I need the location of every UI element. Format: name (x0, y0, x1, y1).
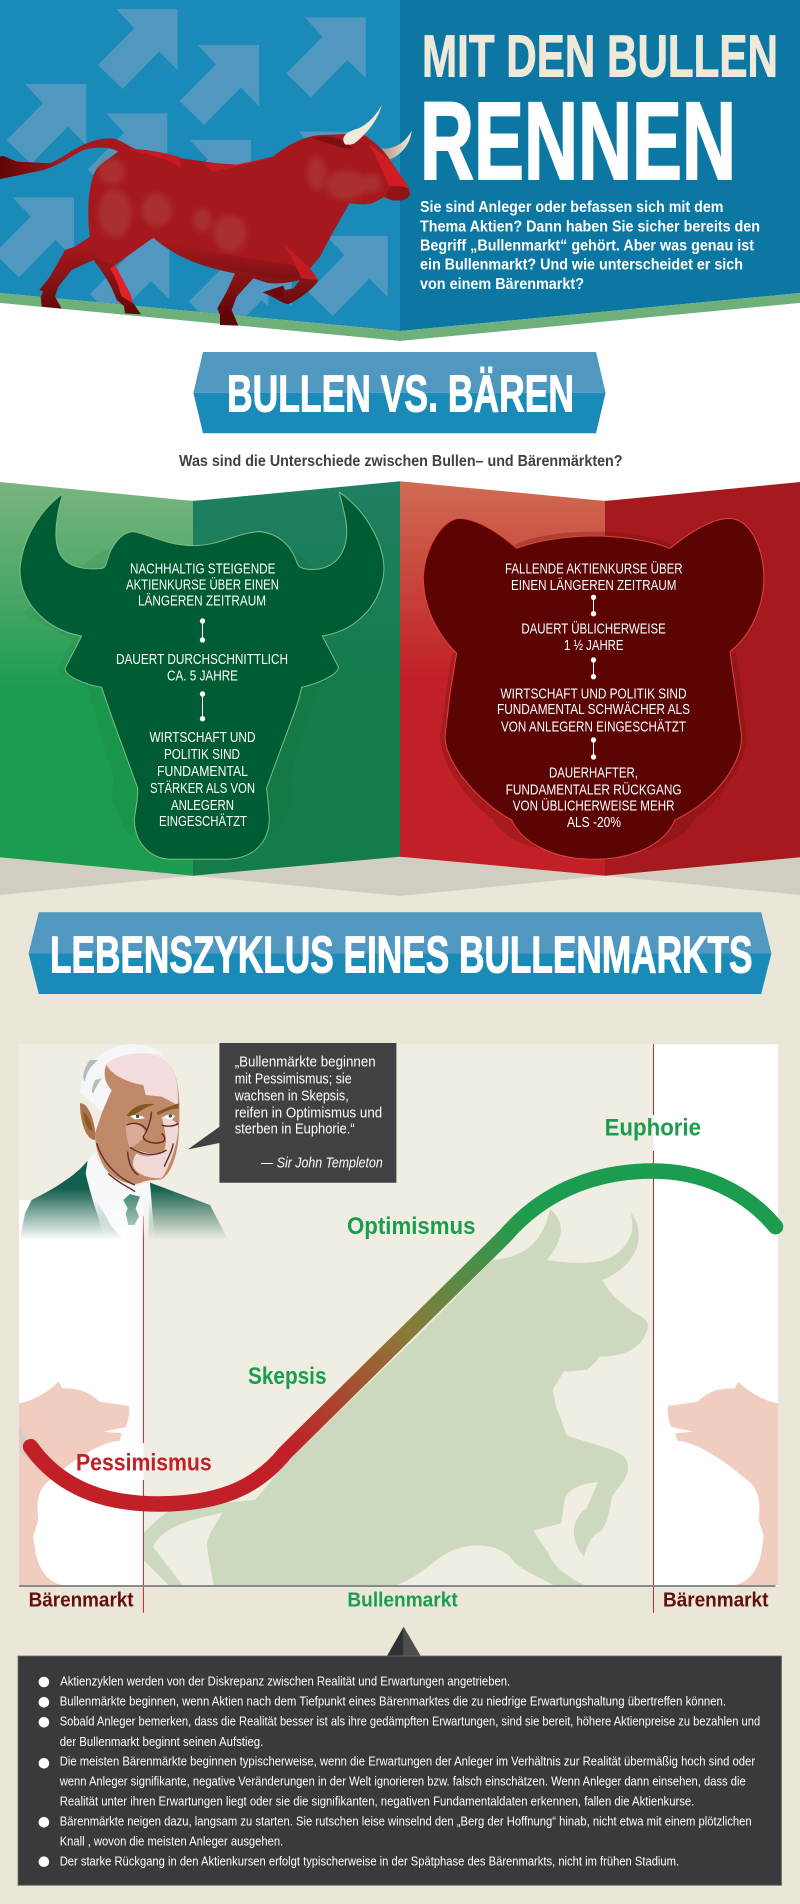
tie (123, 1194, 140, 1225)
connector (591, 738, 596, 759)
suit (18, 1161, 232, 1247)
bear text 2: DAUERT ÜBLICHERWEISE (521, 619, 666, 637)
bull silhouette (143, 1209, 648, 1585)
bear text 4: DAUERHAFTER, (549, 765, 638, 781)
green ground band (0, 293, 800, 341)
bear text 4: ALS -20% (567, 815, 621, 831)
bull text 3: POLITIK SIND (164, 747, 240, 763)
bull text 1: LÄNGEREN ZEITRAUM (138, 593, 266, 610)
cheek highlight (126, 1123, 147, 1148)
green panel right (193, 481, 400, 876)
smile (135, 1149, 163, 1155)
belly shade (153, 238, 310, 279)
quote text: reifen in Optimismus und (235, 1104, 382, 1121)
label: Euphorie: Euphorie (605, 1115, 701, 1142)
notes text: Aktienzyklen werden von der Diskrepanz zwischen Realität und Erwartungen angetrieben. (60, 1675, 510, 1689)
banner lower half (193, 393, 606, 433)
speech bubble (188, 1043, 396, 1183)
label: Skepsis: Skepsis (248, 1363, 326, 1390)
connector (200, 619, 205, 642)
bull text 3: FUNDAMENTAL (157, 764, 248, 780)
bull text 3: EINGESCHÄTZT (159, 813, 247, 830)
bull text 3: WIRTSCHAFT UND (150, 730, 256, 746)
bull head shadow (23, 548, 373, 833)
panel: bear market (400, 481, 800, 876)
connector (591, 658, 596, 679)
green panel left (0, 482, 193, 876)
pointer left face (387, 1627, 404, 1656)
axis label: Bärenmarkt right: Bärenmarkt (663, 1590, 769, 1612)
bull text 3 (150, 730, 256, 830)
rising arrows pattern (0, 9, 388, 326)
axis label: Bullenmarkt: Bullenmarkt (347, 1590, 458, 1612)
bear text 2: 1 ½ JAHRE (564, 638, 624, 654)
notes text: der Bullenmarkt beginnt seinen Aufstieg. (60, 1735, 263, 1749)
red panel left (400, 481, 605, 876)
notes text: Der starke Rückgang in den Aktienkursen erfolgt typischerweise in der Spätphase des Bärenmarkts, nicht im frühen Stadium. (60, 1855, 679, 1869)
bear text 2 (521, 619, 666, 654)
comparison backdrop shadow (0, 857, 800, 896)
ear (80, 1103, 95, 1140)
chart background (19, 1044, 778, 1586)
tail (0, 156, 63, 179)
facial lines (97, 1112, 178, 1192)
banner upper half (193, 352, 606, 393)
notes text: Bullenmärkte beginnen, wenn Aktien nach dem Tiefpunkt eines Bärenmarktes die zu niedrige Erwartungshaltung übertreffen können. (60, 1695, 726, 1709)
face (95, 1055, 179, 1184)
bear text 1: EINEN LÄNGEREN ZEITRAUM (511, 577, 676, 594)
bull text 2: CA. 5 JAHRE (167, 669, 238, 685)
intro text: ein Bullenmarkt? Und wie unterscheidet er sich (420, 257, 743, 274)
bear text 4: FUNDAMENTALER RÜCKGANG (506, 780, 682, 798)
red panel right (605, 482, 800, 876)
notes text: Realität unter ihren Erwartungen liegt oder sie die signifikanten, negativen Fundamentaldaten erkennen, fallen die Aktienkurse. (60, 1795, 694, 1809)
intro text: Sie sind Anleger oder befassen sich mit dem (420, 199, 724, 216)
bull text 1 (126, 561, 279, 610)
bull text 2 (116, 652, 288, 685)
silhouettes (19, 1209, 778, 1585)
panel: explanatory notes (18, 1627, 782, 1885)
bull text 1: AKTIENKURSE ÜBER EINEN (126, 576, 279, 594)
market cycle curve (31, 1171, 776, 1504)
subtitle question: Was sind die Unterschiede zwischen Bullen– und Bärenmärkten? (179, 453, 622, 470)
notes text: Knall , wovon die meisten Anleger ausgehen. (60, 1835, 283, 1849)
icon: running red bull (0, 105, 412, 326)
bright back accents (127, 149, 273, 172)
intro text (420, 199, 760, 293)
near horn (343, 105, 382, 145)
bull text 3: STÄRKER ALS VON (150, 780, 255, 797)
bear head shadow (440, 532, 747, 855)
label: Pessimismus: Pessimismus (76, 1450, 212, 1477)
connector (200, 692, 205, 721)
bull text 2: DAUERT DURCHSCHNITTLICH (116, 652, 288, 668)
white section background (0, 300, 800, 500)
intro text: Begriff „Bullenmarkt“ gehört. Aber was genau ist (420, 237, 754, 254)
main torso colour (88, 133, 409, 273)
quote text: wachsen in Skepsis, (234, 1088, 349, 1105)
bull head shape (20, 492, 384, 859)
panel: hero (0, 0, 800, 345)
bear text 1: FALLENDE AKTIENKURSE ÜBER (505, 559, 683, 577)
bear silhouette left (19, 1382, 129, 1585)
banner: Bullen vs. Bären (193, 352, 606, 433)
muscle highlights (98, 157, 382, 252)
bear head shape (423, 518, 764, 859)
x axis (19, 1585, 776, 1587)
face plane (368, 143, 409, 188)
bear text 4 (506, 765, 682, 831)
axis label: Bärenmarkt left: Bärenmarkt (29, 1590, 134, 1612)
bull body (0, 133, 409, 326)
bear text 4: VON ÜBLICHERWEISE MEHR (513, 796, 674, 814)
eyes (130, 1115, 175, 1120)
vertical marker right (652, 1044, 654, 1613)
hero background right (400, 0, 800, 331)
quote text: sterben in Euphorie.“ (235, 1121, 355, 1138)
connector (591, 595, 596, 616)
nose (387, 186, 410, 201)
quote attribution: — Sir John Templeton (260, 1154, 383, 1171)
bear text 1 (505, 559, 683, 594)
bear market zone right (654, 1044, 778, 1586)
label: Optimismus: Optimismus (347, 1213, 476, 1240)
icon: portrait of Sir John Templeton (18, 1044, 232, 1247)
bear text 3: WIRTSCHAFT UND POLITIK SIND (500, 686, 686, 702)
bright leg accents (110, 265, 133, 303)
banner upper half (29, 912, 771, 953)
bear text 3: VON ANLEGERN EINGESCHÄTZT (501, 718, 686, 735)
bullet dots (39, 1677, 49, 1867)
intro text: von einem Bärenmarkt? (420, 276, 584, 293)
curve end shading (19, 1425, 43, 1475)
pointer right face (404, 1627, 421, 1656)
bear text 3: FUNDAMENTAL SCHWÄCHER ALS (497, 701, 690, 718)
quote text: „Bullenmärkte beginnen (235, 1054, 376, 1071)
bubble body (188, 1043, 396, 1183)
bull text 3: ANLEGERN (171, 798, 234, 814)
bear silhouette right (668, 1382, 778, 1585)
icon: bear head (423, 518, 764, 859)
bull text 1: NACHHALTIG STEIGENDE (130, 561, 276, 577)
quote text (234, 1054, 382, 1138)
bear text 3 (497, 686, 690, 735)
vertical marker left (142, 1216, 144, 1613)
hair (80, 1044, 163, 1112)
icon: bull head (20, 492, 384, 859)
notes background (18, 1656, 782, 1885)
intro text: Thema Aktien? Dann haben Sie sicher bereits den (420, 218, 760, 235)
panel: bull market (0, 481, 400, 876)
lower face highlight (133, 1117, 178, 1178)
forehead highlight (106, 1053, 178, 1105)
notes text (59, 1675, 760, 1869)
eyebrows (127, 1103, 179, 1117)
bear market zone left (19, 1200, 143, 1586)
hoof front (263, 286, 283, 299)
head shade (313, 136, 353, 149)
white area beneath hero (0, 303, 800, 345)
banner lower half (29, 953, 771, 994)
panel: market cycle chart (18, 1043, 778, 1613)
quote text: mit Pessimismus; sie (235, 1071, 352, 1088)
banner heading: BULLEN VS. BÄREN (227, 366, 574, 424)
hair strands (83, 1060, 102, 1093)
far horn (382, 131, 412, 159)
shirt (86, 1152, 155, 1243)
banner: Lebenszyklus (29, 912, 771, 994)
hero background left (0, 0, 400, 331)
